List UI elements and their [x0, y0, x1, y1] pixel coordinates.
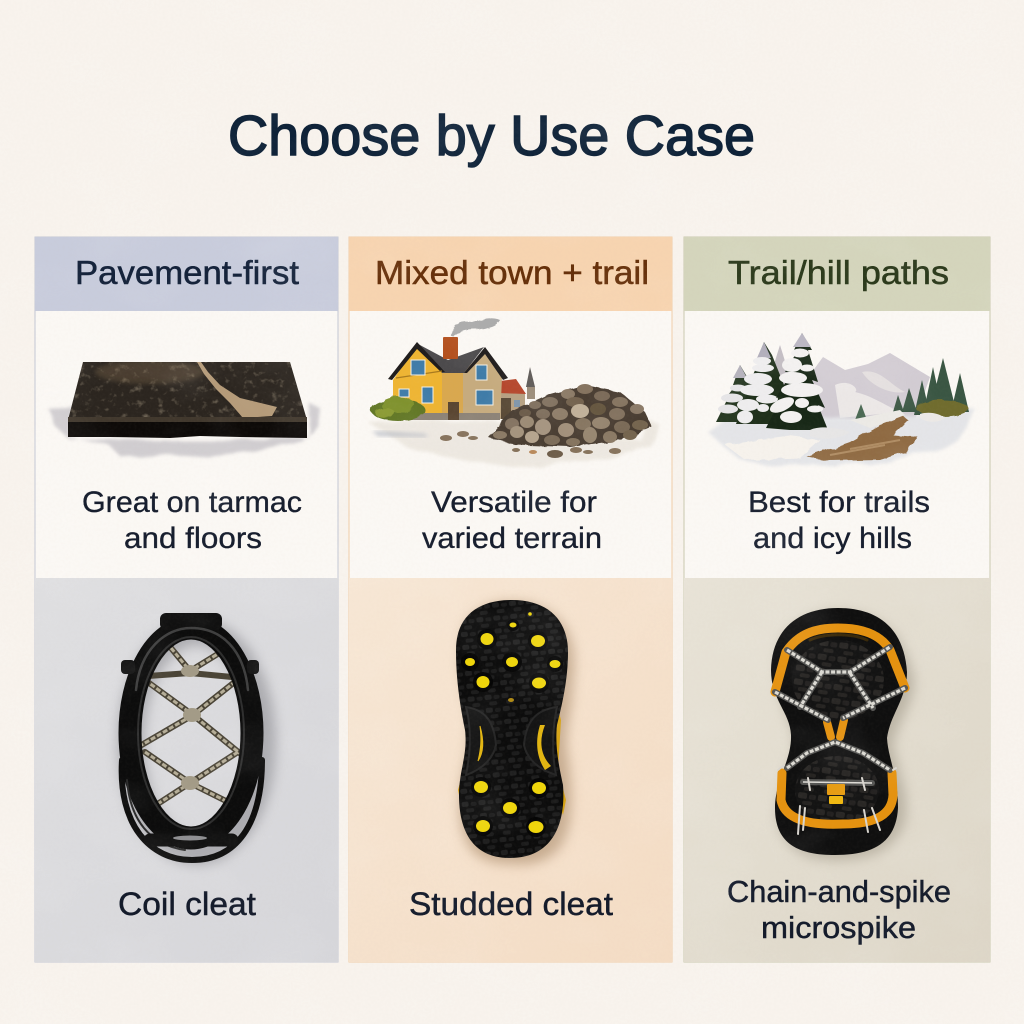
header: mixed town + trail	[349, 237, 672, 311]
text: tarmac description: and floors	[124, 522, 262, 555]
outsole	[456, 600, 568, 858]
icon: snowy trees and trail	[708, 333, 975, 466]
product area: studded cleat	[349, 578, 672, 962]
icon: house and gravel	[368, 318, 660, 468]
text: tarmac description	[82, 486, 302, 555]
small tree	[855, 404, 867, 420]
door	[448, 402, 459, 420]
icon: studded sole	[456, 600, 574, 864]
yellow midsole edge	[458, 705, 566, 815]
label: chain-and-spike microspike	[727, 875, 951, 945]
snow mounds	[810, 427, 850, 439]
olive undergrowth	[916, 400, 968, 416]
icon: coil cleat	[121, 613, 263, 860]
windows	[399, 360, 493, 405]
label: studded cleat: Studded cleat	[409, 886, 613, 922]
tree: left	[716, 365, 764, 422]
arch panels	[466, 707, 496, 775]
header: mixed town + trail: Mixed town + trail	[375, 254, 649, 291]
chains	[133, 648, 242, 805]
text: tarmac description: Great on tarmac	[82, 486, 302, 519]
forefoot tread	[792, 640, 884, 720]
label: chain-and-spike microspike: microspike	[761, 911, 916, 945]
header: pavement-first: Pavement-first	[75, 254, 299, 291]
panel: mixed town + trail	[349, 237, 672, 962]
header: trail/hill paths	[684, 237, 990, 311]
gravel pile	[488, 384, 652, 447]
shrub	[371, 397, 425, 421]
upper harness orange	[775, 628, 905, 737]
tree: large front	[766, 333, 828, 430]
icon: chain-and-spike microspike	[771, 608, 914, 860]
trail	[807, 416, 918, 461]
panel: trail and hill paths	[684, 237, 990, 962]
right evergreens	[893, 358, 969, 415]
yellow centre block	[827, 784, 845, 804]
rubber coils	[121, 613, 262, 860]
smoke	[451, 318, 500, 338]
tree: middle	[736, 342, 792, 424]
icon: asphalt slab	[50, 358, 320, 458]
label: chain-and-spike microspike: Chain-and-spike	[727, 875, 951, 909]
text: trails description: and icy hills	[753, 522, 912, 555]
label: coil cleat: Coil cleat	[118, 886, 256, 922]
panel: pavement-first	[35, 237, 338, 962]
roof	[388, 342, 508, 380]
product area: coil cleat	[35, 578, 338, 962]
church tower	[526, 367, 535, 399]
chimney	[443, 337, 458, 359]
spikes	[778, 766, 896, 834]
ground wash	[368, 420, 660, 468]
chains	[775, 647, 905, 783]
text: trails description: Best for trails	[748, 486, 930, 519]
text: terrain description	[422, 486, 602, 555]
panel frame and image area	[684, 237, 990, 962]
panel frame and image area	[35, 237, 338, 962]
sole	[771, 608, 907, 855]
header: pavement-first	[35, 237, 338, 311]
header: trail/hill paths: Trail/hill paths	[728, 254, 949, 291]
text: terrain description: varied terrain	[422, 522, 602, 555]
title: Choose by Use Case	[228, 104, 755, 168]
house walls	[393, 345, 442, 420]
yellow arch slots	[478, 726, 483, 761]
panel frame and image area	[349, 237, 672, 962]
mountains	[800, 353, 930, 420]
loose stones	[440, 431, 621, 458]
text: terrain description: Versatile for	[431, 486, 597, 519]
studs	[461, 612, 563, 837]
product area: microspike	[684, 578, 990, 962]
tree: small back	[766, 345, 794, 390]
heel tread	[795, 756, 879, 824]
annex	[498, 379, 526, 419]
ground snow	[708, 408, 975, 466]
text: trails description	[748, 486, 930, 555]
lower harness orange	[781, 773, 893, 824]
